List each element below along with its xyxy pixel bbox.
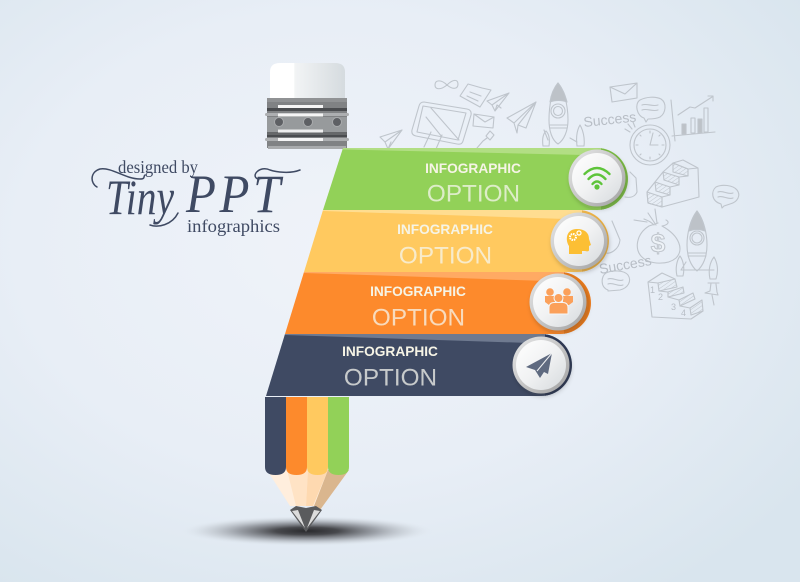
green end shade [601,148,628,210]
eraser metal ferrule [265,98,349,149]
doodle: rocket two [676,211,717,279]
pencil body [265,397,349,532]
orange text [370,284,466,332]
doodle: infinity [435,80,458,89]
band: yellow option [304,210,609,272]
doodle: pin two [705,283,719,305]
navy text: INFOGRAPHIC [342,344,438,359]
doodle: pins behind buttons [606,172,637,253]
orange highlight [304,272,580,281]
orange text: INFOGRAPHIC [370,284,466,299]
doodle: large paper plane [507,102,536,133]
navy end shade [545,334,572,396]
yellow ribbon [304,210,609,272]
green text: INFOGRAPHIC [425,161,521,176]
green ribbon [323,148,628,210]
doodle: note [460,84,491,107]
doodle: stairs digits: 2 [658,292,663,302]
doodle: stairs digits [650,285,686,318]
doodle: small paper plane [487,93,509,111]
doodle: stairs one [647,160,699,207]
pencil wood cone [267,470,349,506]
eraser rubber [270,63,345,98]
pencil coloured stripes [265,397,349,475]
doodle: stairs two [648,273,703,319]
navy ribbon [266,334,572,396]
logo line: infographics: infographics [187,216,280,236]
yellow text [397,222,493,270]
yellow text: INFOGRAPHIC [397,222,493,237]
yellow highlight [323,210,598,219]
orange ribbon [285,272,591,334]
band: orange option [285,272,591,334]
orange text: OPTION [372,304,465,332]
doodle: stairs digits: 3 [671,302,676,312]
eraser [265,63,349,149]
logo line: designed by: designed by [118,157,198,177]
doodle: rocket [543,83,584,146]
green highlight [343,148,617,156]
doodle: left paper plane [380,130,402,149]
pencil lead tip [290,506,322,532]
doodle: money bag: $ [651,228,666,258]
doodle: pin [477,131,494,148]
navy highlight [285,334,562,343]
doodle: bar chart [671,96,715,141]
doodle: success word two: Success [598,252,653,277]
doodles: business sketches [380,80,739,319]
green text [425,161,521,208]
yellow button with head icon [550,212,608,270]
yellow end shade [582,210,609,272]
navy button with paper plane icon [512,336,570,394]
navy text [342,344,438,392]
band: navy option [266,334,572,396]
yellow text: OPTION [399,242,492,270]
logo script: Tiny PPT: PPT [185,164,284,224]
green text: OPTION [427,180,520,208]
doodle: envelope upper right [610,83,637,102]
navy text: OPTION [344,364,437,392]
doodle: success word: Success [583,109,637,130]
band: green option [323,148,628,210]
doodle: chat bubble [637,97,665,122]
doodle: chat bubble lower [602,271,630,291]
logo script: Tiny PPT: Tiny [106,169,175,225]
doodle: stairs digits: 1 [650,285,655,295]
doodle: chat bubble right [713,185,739,208]
logo script: Tiny PPT [92,164,300,226]
doodle: money bag [634,209,680,263]
doodle: envelope [473,114,494,128]
floor shadow [181,516,433,546]
logo: designed by TinyPPT infographics [92,157,300,236]
doodle: stairs digits: 4 [681,308,686,318]
orange end shade [564,272,591,334]
orange button with people icon [530,274,586,330]
doodle: clock [625,122,670,165]
green button with wifi icon [568,150,626,206]
doodle: monitor [412,102,471,149]
